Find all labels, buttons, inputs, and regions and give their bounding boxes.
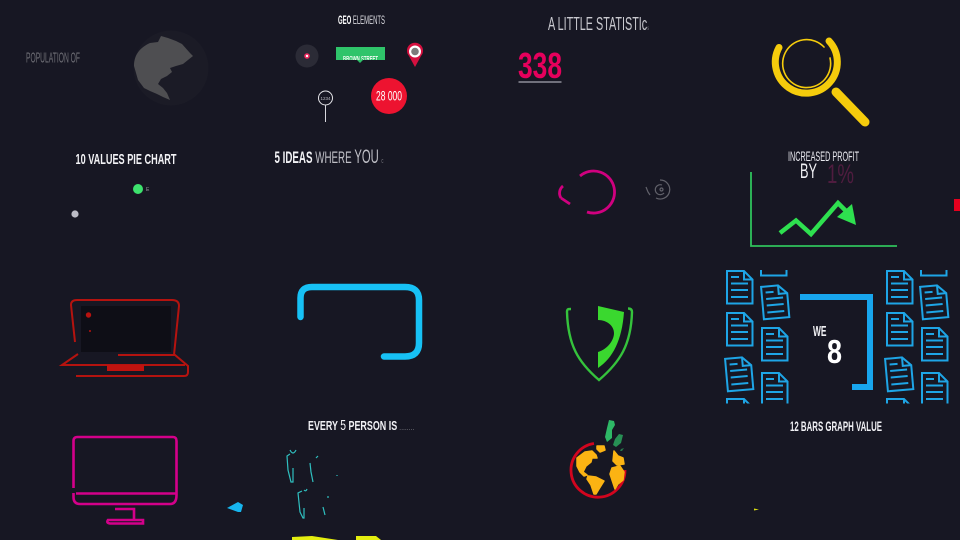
panel: population globe: POPULATION OF — [26, 50, 80, 66]
underline — [518, 81, 562, 83]
panel: yellow partial shapes at bottom — [292, 536, 381, 540]
green people — [605, 420, 624, 451]
chart axes — [751, 172, 897, 246]
person outlines — [287, 450, 337, 518]
icon: earth with ring — [571, 420, 625, 497]
icon: green shield — [567, 306, 632, 380]
panel: documents and value — [724, 270, 950, 404]
panel: a little statistics — [518, 14, 649, 86]
blue bracket — [800, 297, 870, 387]
red ring — [571, 444, 625, 497]
percent value: 1% — [827, 159, 854, 189]
value 8: 8 — [827, 333, 842, 370]
heading: A LITTLE STATISTIcs — [548, 14, 649, 34]
small mark: E — [146, 187, 150, 193]
panel: increased profit — [751, 148, 897, 246]
red value circle: 28 000 — [376, 88, 402, 104]
we label: WE — [813, 323, 826, 340]
number 338: 338 — [518, 45, 562, 86]
panel: blue rounded frame — [300, 287, 419, 356]
small yellow mark — [754, 508, 759, 510]
grey dot — [71, 210, 79, 218]
icon: laptop — [62, 300, 188, 376]
icon: blue arrow — [227, 502, 243, 512]
laptop outline — [62, 300, 188, 376]
green dot — [133, 184, 143, 194]
icon: magnifying glass — [775, 40, 865, 122]
icon: radar dot — [296, 44, 318, 68]
screen dots — [86, 312, 91, 332]
laptop screen — [81, 306, 171, 352]
green label tag: BROWN STREET — [343, 56, 378, 63]
icon: grey spiral — [646, 180, 670, 199]
shield inner fill — [598, 306, 624, 368]
icon: map pin — [407, 43, 423, 67]
heading: EVERY 5 PERSON IS . . . . . . . . — [308, 417, 414, 434]
panel: 5 ideas heading: 5 IDEAS WHERE YOU c — [274, 147, 384, 168]
heading: 10 VALUES PIE CHART — [76, 151, 176, 168]
icon: dim globe — [134, 30, 208, 106]
by label: BY — [800, 160, 817, 183]
location marker: 1234 — [320, 96, 331, 101]
continents — [577, 446, 624, 494]
panel: red side marker — [954, 199, 960, 211]
heading: GEO ELEMENTS — [338, 13, 385, 27]
panel: loading rings — [560, 171, 670, 213]
laptop trackpad — [107, 365, 144, 371]
heading: 12 BARS GRAPH VALUE — [790, 418, 882, 434]
panel: 10 values pie chart — [71, 151, 176, 218]
panel: every 5 person — [287, 417, 414, 518]
icon: desktop monitor — [74, 437, 176, 524]
shield outline — [567, 308, 632, 380]
panel: population globe — [26, 30, 208, 106]
document grid — [724, 270, 950, 404]
green arrow line — [780, 203, 856, 234]
panel: geo elements — [296, 13, 423, 122]
heading: INCREASED PROFIT — [788, 148, 859, 164]
icon: magenta ring — [560, 171, 615, 213]
panel: 12 bars graph — [754, 418, 882, 510]
